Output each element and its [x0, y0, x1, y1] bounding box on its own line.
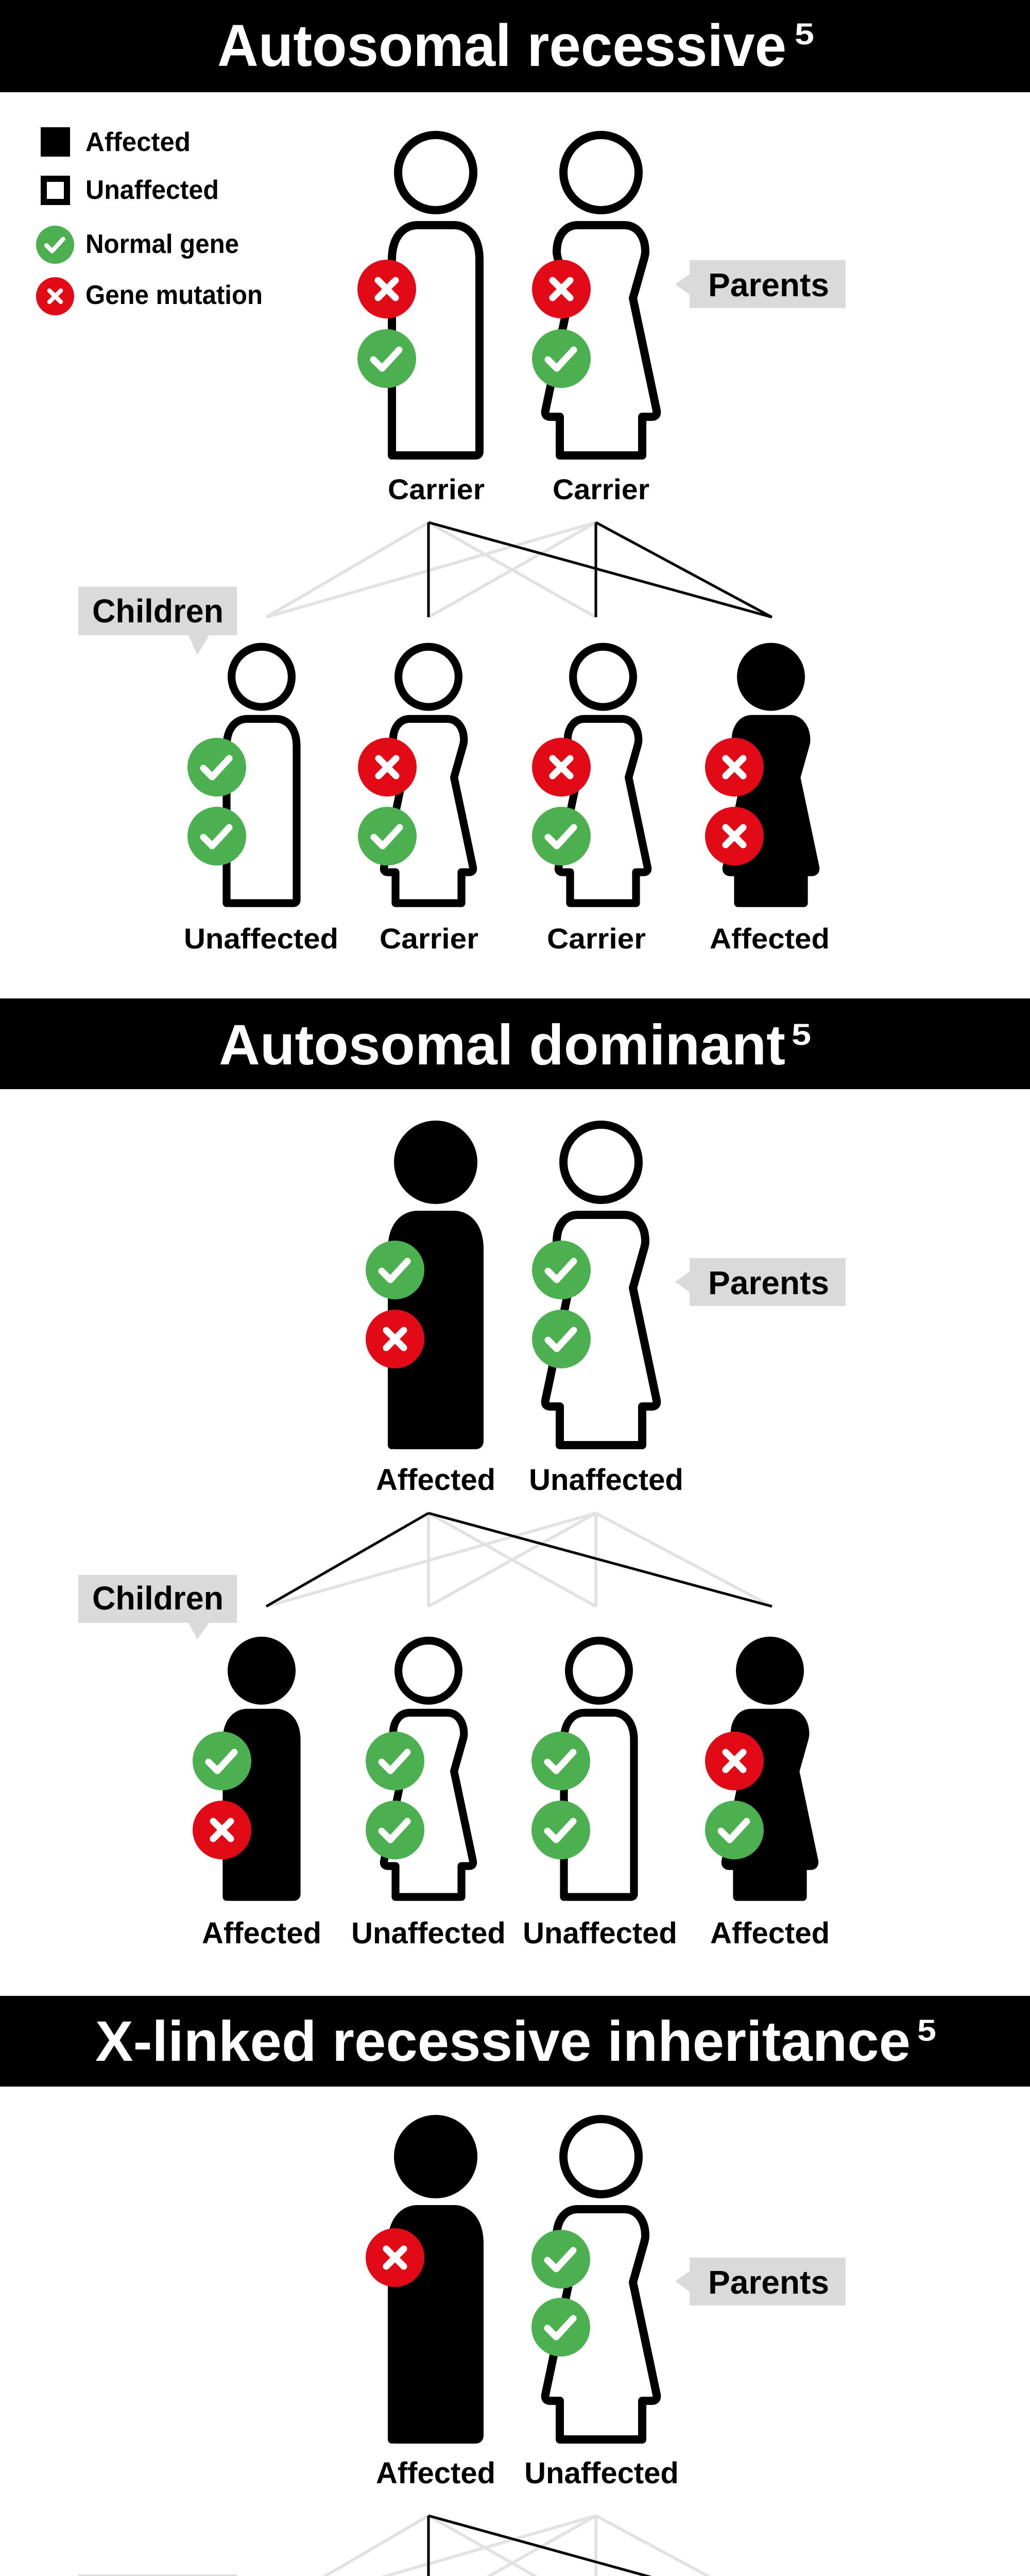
s2 parents callout: Parents [708, 1264, 829, 1301]
s1 parent mother carrier [545, 135, 657, 455]
s1 children labels: Unaffected [184, 922, 338, 955]
section 1 header: Autosomal recessive [0, 0, 1030, 92]
s2 children genes [193, 1732, 764, 1859]
legend: affected: Affected [85, 127, 191, 157]
s3 parent father affected [392, 2119, 479, 2439]
section 3 header: X-linked recessive inheritance: 5 [917, 2014, 936, 2047]
section 2 header: Autosomal dominant [0, 998, 1030, 1089]
s2 children labels: Unaffected [523, 1917, 677, 1950]
s3 parents callout [675, 2258, 846, 2306]
section 3 header: X-linked recessive inheritance [0, 1996, 1030, 2087]
s2 parent labels [376, 1463, 683, 1497]
s2 parent genes [366, 1241, 591, 1368]
s1 children labels: Affected [710, 922, 830, 955]
s1 parent labels: Carrier [388, 473, 485, 505]
s2 parent labels: Affected [376, 1463, 495, 1497]
section 3 header: X-linked recessive inheritance: X-linked recessive inheritance [95, 2010, 911, 2073]
legend: normal gene [36, 226, 239, 264]
s3 children callout [78, 2574, 237, 2576]
s2 children figures [227, 1640, 815, 1897]
s1 parents callout [675, 260, 846, 308]
s3 inheritance lines [266, 2516, 772, 2576]
s2 children labels: Affected [710, 1917, 830, 1950]
s3 parents callout: Parents [708, 2264, 829, 2301]
s2 inheritance lines [266, 1513, 772, 1606]
s3 parent mother unaffected [545, 2119, 657, 2439]
s1 parent genes [357, 260, 591, 388]
section 1 header: Autosomal recessive: 5 [795, 18, 814, 51]
s1 parents callout: Parents [708, 266, 829, 303]
s1 children figures [227, 647, 816, 903]
s1 children labels: Carrier [380, 922, 478, 955]
s3 parent genes [366, 2228, 590, 2357]
s1 children labels [184, 922, 830, 955]
s2 children labels: Affected [202, 1917, 321, 1950]
s3 parent labels [376, 2456, 679, 2490]
section 1 header: Autosomal recessive: Autosomal recessive [217, 13, 786, 79]
s1 parent father carrier [392, 135, 479, 455]
s1 parent labels: Carrier [553, 473, 649, 505]
s3 parent labels: Affected [376, 2456, 495, 2490]
s2 parent mother unaffected [545, 1125, 657, 1445]
legend: affected [41, 127, 191, 157]
s2 children callout: Children [92, 1580, 224, 1617]
s2 parent labels: Unaffected [529, 1463, 683, 1497]
legend: gene mutation: Gene mutation [85, 280, 263, 310]
s3 parent labels: Unaffected [524, 2456, 679, 2490]
legend: normal gene: Normal gene [85, 229, 239, 259]
s2 children labels [202, 1917, 830, 1950]
s2 children callout [78, 1575, 237, 1639]
s1 children callout: Children [92, 592, 224, 630]
s1 inheritance lines [266, 522, 772, 617]
s1 children genes [187, 738, 764, 866]
s2 parents callout [675, 1258, 846, 1306]
s1 children labels: Carrier [547, 922, 646, 955]
section 2 header: Autosomal dominant: Autosomal dominant [219, 1013, 785, 1077]
s2 children labels: Unaffected [351, 1917, 506, 1950]
section 2 header: Autosomal dominant: 5 [792, 1018, 811, 1052]
s1 children callout [78, 587, 237, 655]
s2 parent father affected [392, 1125, 479, 1445]
legend [36, 127, 263, 315]
legend: unaffected: Unaffected [85, 175, 219, 205]
legend: gene mutation [36, 277, 263, 315]
s1 parent labels [388, 473, 649, 505]
